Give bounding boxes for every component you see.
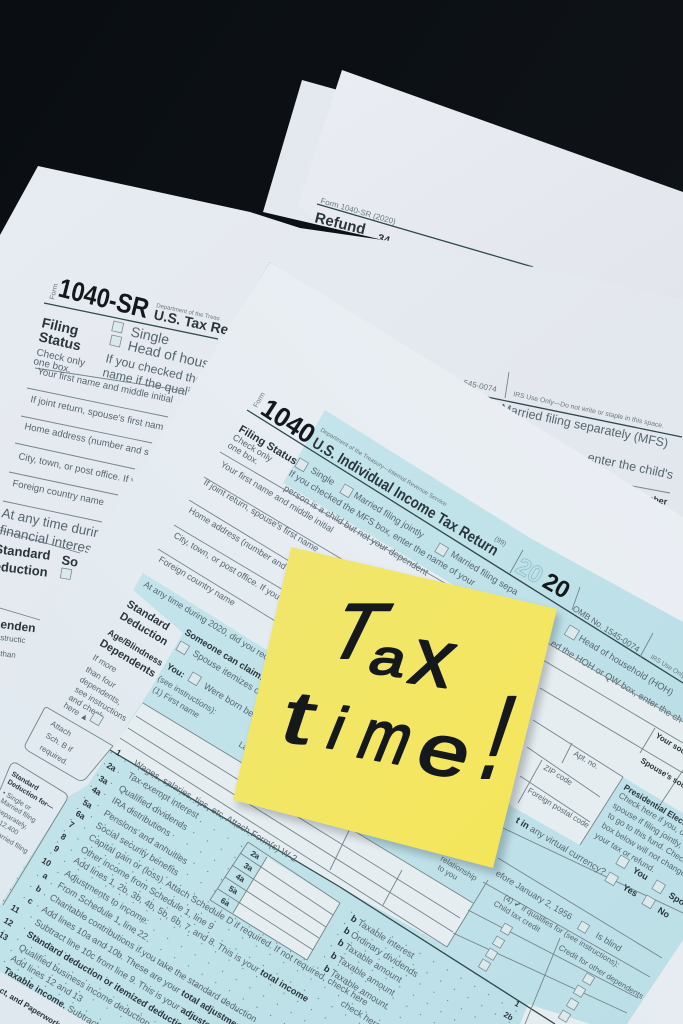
standard deduction box: Deduction for— [6, 779, 55, 812]
filing status: Filing [40, 314, 80, 338]
dependents table [436, 854, 645, 1023]
address labels: ZIP code [542, 763, 574, 787]
income boxes 2a to 6a: 2a [249, 849, 262, 862]
handwritten word: Tax [313, 588, 467, 705]
income line numbers [0, 747, 123, 943]
handwritten exclamation mark: ! [466, 673, 531, 804]
blue header band [283, 410, 683, 722]
filing status: Single [129, 323, 171, 348]
income line text [0, 758, 370, 1024]
taxable amounts column [322, 913, 420, 1024]
handwritten word: Tax: T [313, 588, 403, 675]
someone can claim block: Last name [237, 739, 276, 768]
virtual currency question: At any time during 2020, did you receive [142, 579, 285, 670]
dependents table: to you [436, 863, 459, 882]
income line numbers: c [26, 895, 35, 906]
form title: Department of the Treasury—Internal Revenue Service [319, 428, 448, 508]
right part of sheet: Married filing separately (MFS) [499, 401, 669, 450]
sticky note shadow [236, 553, 561, 875]
white name rows [110, 703, 473, 947]
income boxes 2a to 6a: 3a [242, 861, 255, 874]
standard deduction box: • Single or [1, 790, 33, 813]
tax year [511, 553, 575, 605]
address labels: Foreign postal code [526, 786, 591, 830]
age and dependents: than four [84, 664, 118, 690]
tax year: 20 [511, 553, 548, 590]
right part of sheet: enter the child's [586, 450, 675, 482]
income line numbers: 9 [52, 843, 61, 854]
income line numbers: 1 [114, 747, 123, 758]
virtual currency answer: Yes [621, 882, 639, 899]
front sheet: Form 1040: Form [253, 391, 267, 409]
middle sheet: Form 1040-SR: structic [0, 633, 26, 645]
virtual currency question: At any time durir [0, 505, 100, 540]
dependents table: relationship [439, 854, 479, 883]
handwritten word: time: m [347, 696, 426, 780]
filing status: Check only [35, 347, 86, 369]
standard deduction box: Married filing [0, 798, 37, 824]
income line numbers: 7 [67, 819, 76, 830]
filing status: one box. [32, 356, 72, 376]
income line numbers: 5a [81, 797, 94, 811]
name and address rows: Foreign country name [157, 554, 237, 608]
sticky note [233, 547, 557, 868]
form footer label: Form 1040-SR (2020) [319, 196, 397, 226]
attach box [25, 707, 113, 780]
age and dependents: dependents, [78, 674, 123, 707]
filing status: Single [309, 464, 337, 487]
dependents table: 1 [513, 999, 522, 1009]
income line text: Social security benefits [94, 820, 181, 878]
handwritten word: time: i [318, 695, 357, 761]
someone can claim block: (see instructions): [156, 673, 219, 716]
income line numbers: 6a [74, 808, 87, 822]
tax year: 20 [538, 568, 575, 605]
filing status [226, 423, 521, 598]
name and address rows: Your first name and middle initial [36, 366, 174, 406]
name and address rows: Foreign country name [11, 478, 105, 508]
dependents table: 2b [502, 1010, 515, 1023]
presidential election box [593, 782, 683, 915]
age and dependents: Age/Blindness [106, 627, 165, 668]
standard deduction box: Standard [10, 771, 40, 792]
age and dependents: Dependents [97, 637, 158, 680]
filing status: person is a child but not your dependent [282, 482, 431, 578]
OMB number and head of household: ed the HOH or QW box, enter the ch [549, 637, 683, 725]
income line numbers: 3a [97, 773, 110, 787]
filing status: If you checked the [104, 351, 204, 387]
filing status: name if the qualif [101, 365, 196, 400]
presidential election box: You [631, 865, 650, 882]
form number heading: 1040 [256, 393, 321, 450]
rows and table lines [110, 660, 683, 1024]
right part of sheet [463, 372, 682, 507]
name and address rows [11, 366, 174, 508]
blue main form area [0, 573, 683, 1024]
form number heading: 1040-SR [56, 273, 152, 324]
income line text: Other income from Schedule 1, line 9 [79, 844, 216, 932]
attach box: Attach [49, 719, 73, 738]
front sheet: Form 1040 [0, 262, 683, 1024]
middle sheet: Form 1040-SR: financial interes [0, 522, 93, 556]
income line text: Adjustments to income: [63, 868, 151, 926]
dependents table: efore January 2, 1956 [494, 868, 574, 922]
filing status: Married filing sepa [449, 548, 521, 598]
white income boxes [233, 857, 340, 960]
form title: U.S. Individual Income Tax Return [309, 435, 501, 560]
taxable amounts column: b Taxable interest [349, 913, 417, 961]
filing status: Married filing jointly [352, 489, 427, 540]
filing status: one box. [226, 440, 261, 466]
income line numbers: 4a [90, 784, 103, 798]
income line text: Wages, salaries, tips, etc. Attach Form(s) W-2 [132, 758, 299, 864]
income boxes 2a to 6a: 5a [227, 884, 240, 897]
name and address rows: Your first name and middle initial [219, 459, 335, 535]
filing status: If you checked the MFS box, enter the name of your [287, 467, 478, 588]
filing status: Check only [231, 432, 275, 464]
name and address rows: If joint return, spouse's first nam [29, 394, 164, 433]
income line text: Charitable contributions if you take the standard deduction [48, 892, 259, 1024]
income line numbers: a [41, 870, 50, 881]
dependents table: (4) ✔ if qualifies for (see instructions): [502, 893, 621, 969]
someone can claim block: Someone can claim: [183, 626, 266, 682]
someone can claim block: Were born before [202, 680, 270, 727]
age and dependents: here ▲ [62, 700, 91, 723]
middle sheet: Form 1040-SR: Department of the Treas [156, 303, 220, 322]
standard deduction: Standard [124, 598, 172, 633]
taxable amounts column: b Taxable amount [329, 950, 397, 998]
name and address rows: Home address (number and s [23, 421, 150, 458]
someone can claim block: You: [165, 661, 187, 680]
middle sheet: Form 1040-SR: Form [49, 283, 60, 300]
form title: (99) [493, 536, 507, 548]
dependents table: Credit for other dependents [557, 943, 645, 1001]
income line text: Qualified dividends [117, 783, 190, 832]
virtual currency answer: No [656, 905, 672, 920]
age and dependents: and check [67, 692, 106, 721]
dotted leader texture [0, 750, 555, 1024]
form title: U.S. Tax Re [152, 306, 230, 338]
right part of sheet: mber [645, 493, 669, 507]
virtual currency answer [514, 814, 672, 920]
dependents table: Child tax credit [492, 899, 543, 934]
OMB number and head of household: OMB No. 1545-0074 [571, 603, 642, 654]
filing status [32, 314, 219, 400]
income line text: IRA distributions [110, 795, 173, 838]
taxable amounts column: b Taxable amount [322, 963, 390, 1011]
handwritten word: Tax: x [401, 611, 467, 705]
name and address rows [157, 452, 683, 722]
handwritten word: time [271, 675, 483, 794]
someone can claim block: Spouse itemizes on a [191, 647, 274, 703]
middle sheet: Form 1040-SR: than [0, 649, 16, 660]
attach box: required. [38, 743, 70, 767]
income line numbers: 2a [105, 760, 118, 774]
name and address rows: Home address (number and street) [187, 505, 312, 586]
income boxes 2a to 6a: 4a [234, 872, 247, 885]
income boxes 2a to 6a: 6a [219, 896, 232, 909]
filing status: Head of house [126, 337, 219, 373]
handwritten word: Tax: a [362, 629, 415, 688]
income line text: Capital gain or (loss). Attach Schedule D if required. If not required, check here [87, 832, 370, 1008]
taxable amounts column: b Taxable amount [336, 937, 404, 985]
name and address rows: If joint return, spouse's first name [202, 477, 321, 554]
filing status: Status [37, 328, 83, 354]
virtual currency answer: t in any virtual currency? [514, 814, 608, 877]
middle sheet: Form 1040-SR: So [60, 552, 80, 570]
standard deduction: Deduction [117, 610, 170, 648]
income line text: Tax-exempt interest [126, 770, 201, 821]
address labels [526, 731, 683, 830]
income line numbers: b [34, 883, 44, 894]
dependents table: Is blind [594, 930, 624, 953]
handwritten word: time: t [271, 675, 327, 760]
income line text: Pensions and annuities [102, 808, 190, 866]
age and dependents: If more [91, 652, 119, 674]
income boxes 2a to 6a [210, 842, 340, 960]
back sheet: Form 1040-SR page 2 [298, 70, 683, 310]
name and address rows: City, town, or post office. If y [17, 451, 137, 487]
income line numbers: 11 [9, 902, 22, 915]
back sheet: lower page [263, 80, 683, 310]
attach box: Sch. B if [44, 731, 75, 754]
age and dependents [62, 627, 165, 726]
income line text: From Schedule 1, line 22 [56, 880, 150, 942]
white line 1 cells [520, 1004, 590, 1024]
name and address rows: City, town, or post office. If you have [172, 530, 301, 613]
someone can claim block: (1) First name [151, 684, 202, 720]
income line numbers: 8 [59, 831, 68, 842]
income line numbers: 12 [2, 915, 15, 929]
income line numbers: 10 [40, 855, 53, 869]
OMB number and head of household: Head of household (HOH) [577, 632, 676, 698]
standard deduction box [0, 763, 67, 905]
white address rows [513, 645, 683, 845]
income line text: Add lines 12 and 13 [9, 953, 85, 1004]
dependents fragment: enden [0, 617, 36, 635]
refund heading: Refund [313, 209, 367, 238]
handwritten word: time: e [407, 708, 483, 794]
right part of sheet: 545-0074 [463, 378, 498, 394]
middle sheet: Form 1040-SR [0, 166, 683, 700]
income line text: Add lines 1, 2b, 3b, 4b, 5b, 6b, 7, and 8. This is your total income [72, 855, 310, 1004]
back sheet: Form 1040-SR page 2: 34 [376, 232, 392, 247]
filing status: Filing Status [236, 423, 299, 468]
age and dependents: see instructions [73, 684, 129, 723]
OMB number and head of household [510, 550, 683, 725]
right part of sheet: IRS Use Only—Do not write or staple in this space. [513, 391, 665, 430]
address labels: Apt. no. [572, 749, 600, 771]
presidential election box: your tax or refund. [593, 830, 657, 874]
someone can claim block [151, 626, 276, 768]
taxable amounts column: b Ordinary dividends [342, 925, 420, 979]
